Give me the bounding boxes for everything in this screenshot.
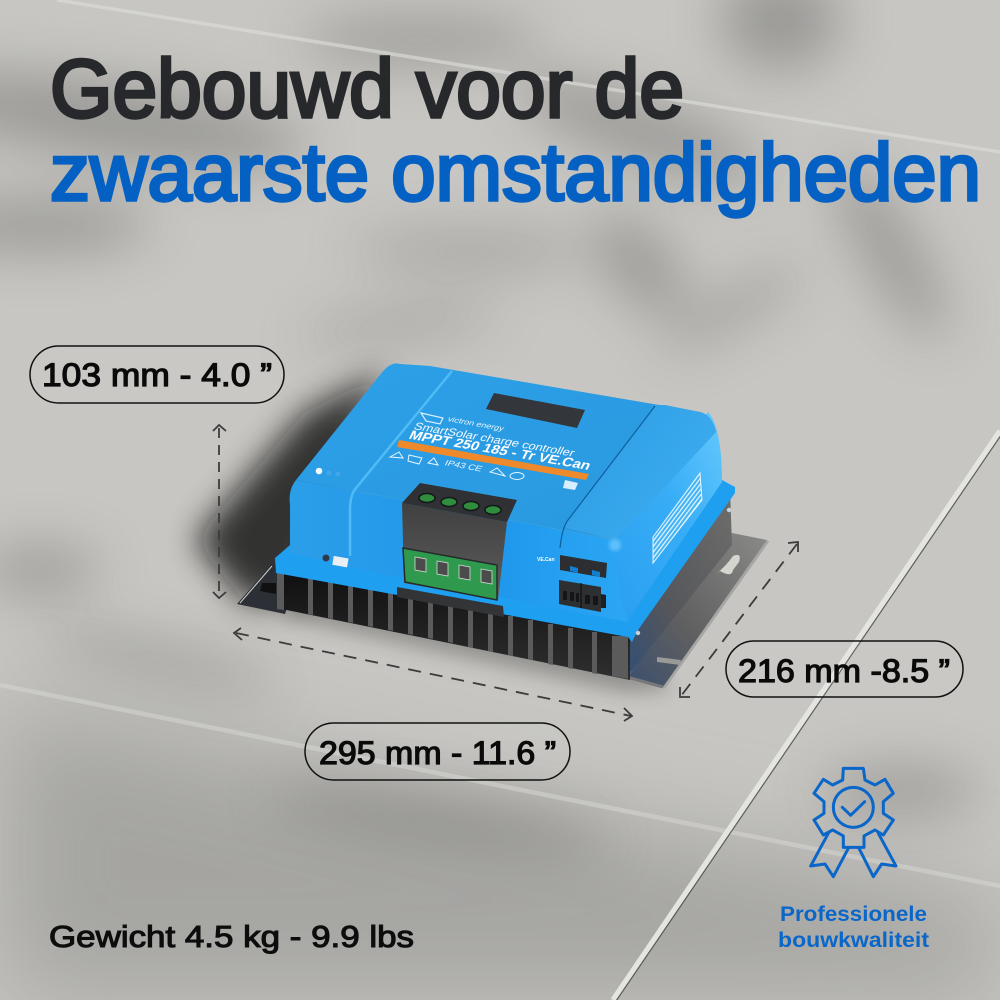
keyhole slots [716,555,740,574]
highlight [609,539,621,551]
tile joint: top [57,0,1000,152]
dimension: length arrow [234,628,632,721]
badge caption [778,903,929,952]
orange bar [397,440,589,480]
VE.Can ports: VE.Can [537,557,555,563]
vent label [653,473,702,563]
pill: height [30,346,284,403]
housing screws [636,508,731,635]
dimension: depth arrow [680,542,798,697]
product line: SmartSolar charge controller [412,420,577,459]
model line: MPPT 250 185 - Tr VE.Can [406,428,593,473]
weight text: Gewicht 4.5 kg - 9.9 lbs [49,919,414,954]
base plate right flange and wall [620,490,768,688]
housing base rim [275,480,735,642]
dimension: height arrow [213,425,226,598]
pill: length [305,723,570,780]
terminal holes [419,494,501,514]
label: display panel [486,393,585,428]
device cast shadow [195,372,670,692]
right cover panel [563,405,716,540]
housing side face [615,412,722,620]
tile joint: horizontal lower [0,685,1000,886]
base plate left flange [237,564,300,614]
tile joint: bright diagonal [613,431,1000,1000]
pill: depth: 216 mm -8.5 ” [738,653,950,689]
brand text: victron energy [446,415,507,433]
badge caption: bouwkwaliteit [778,929,929,952]
VE.Can ports [537,555,607,578]
housing top face [296,363,716,540]
terminal block [397,483,517,617]
housing front face [290,480,628,622]
pill: height: 103 mm - 4.0 ” [42,357,272,393]
status LEDs [316,468,341,477]
blue housing [275,363,735,642]
title [50,42,981,218]
screw connectors [559,580,606,612]
terminal cover top [402,483,517,522]
left seam [350,371,452,556]
front USB connector [322,554,349,567]
terminal cover front [402,503,507,600]
green connector [403,548,497,600]
device: MPPT solar charge controller [237,363,768,688]
icon: quality gear badge [811,768,896,877]
certification row: IP43 CE [443,459,484,473]
certification row [390,452,578,490]
heatsink fins [277,565,630,680]
black lip [397,587,504,617]
pill: depth [726,641,963,697]
title: Gebouwd voor de [50,42,684,135]
pill: length: 295 mm - 11.6 ” [319,735,556,771]
title: zwaarste omstandigheden [50,128,981,218]
brand logo [421,413,443,424]
badge caption: Professionele [780,903,927,926]
